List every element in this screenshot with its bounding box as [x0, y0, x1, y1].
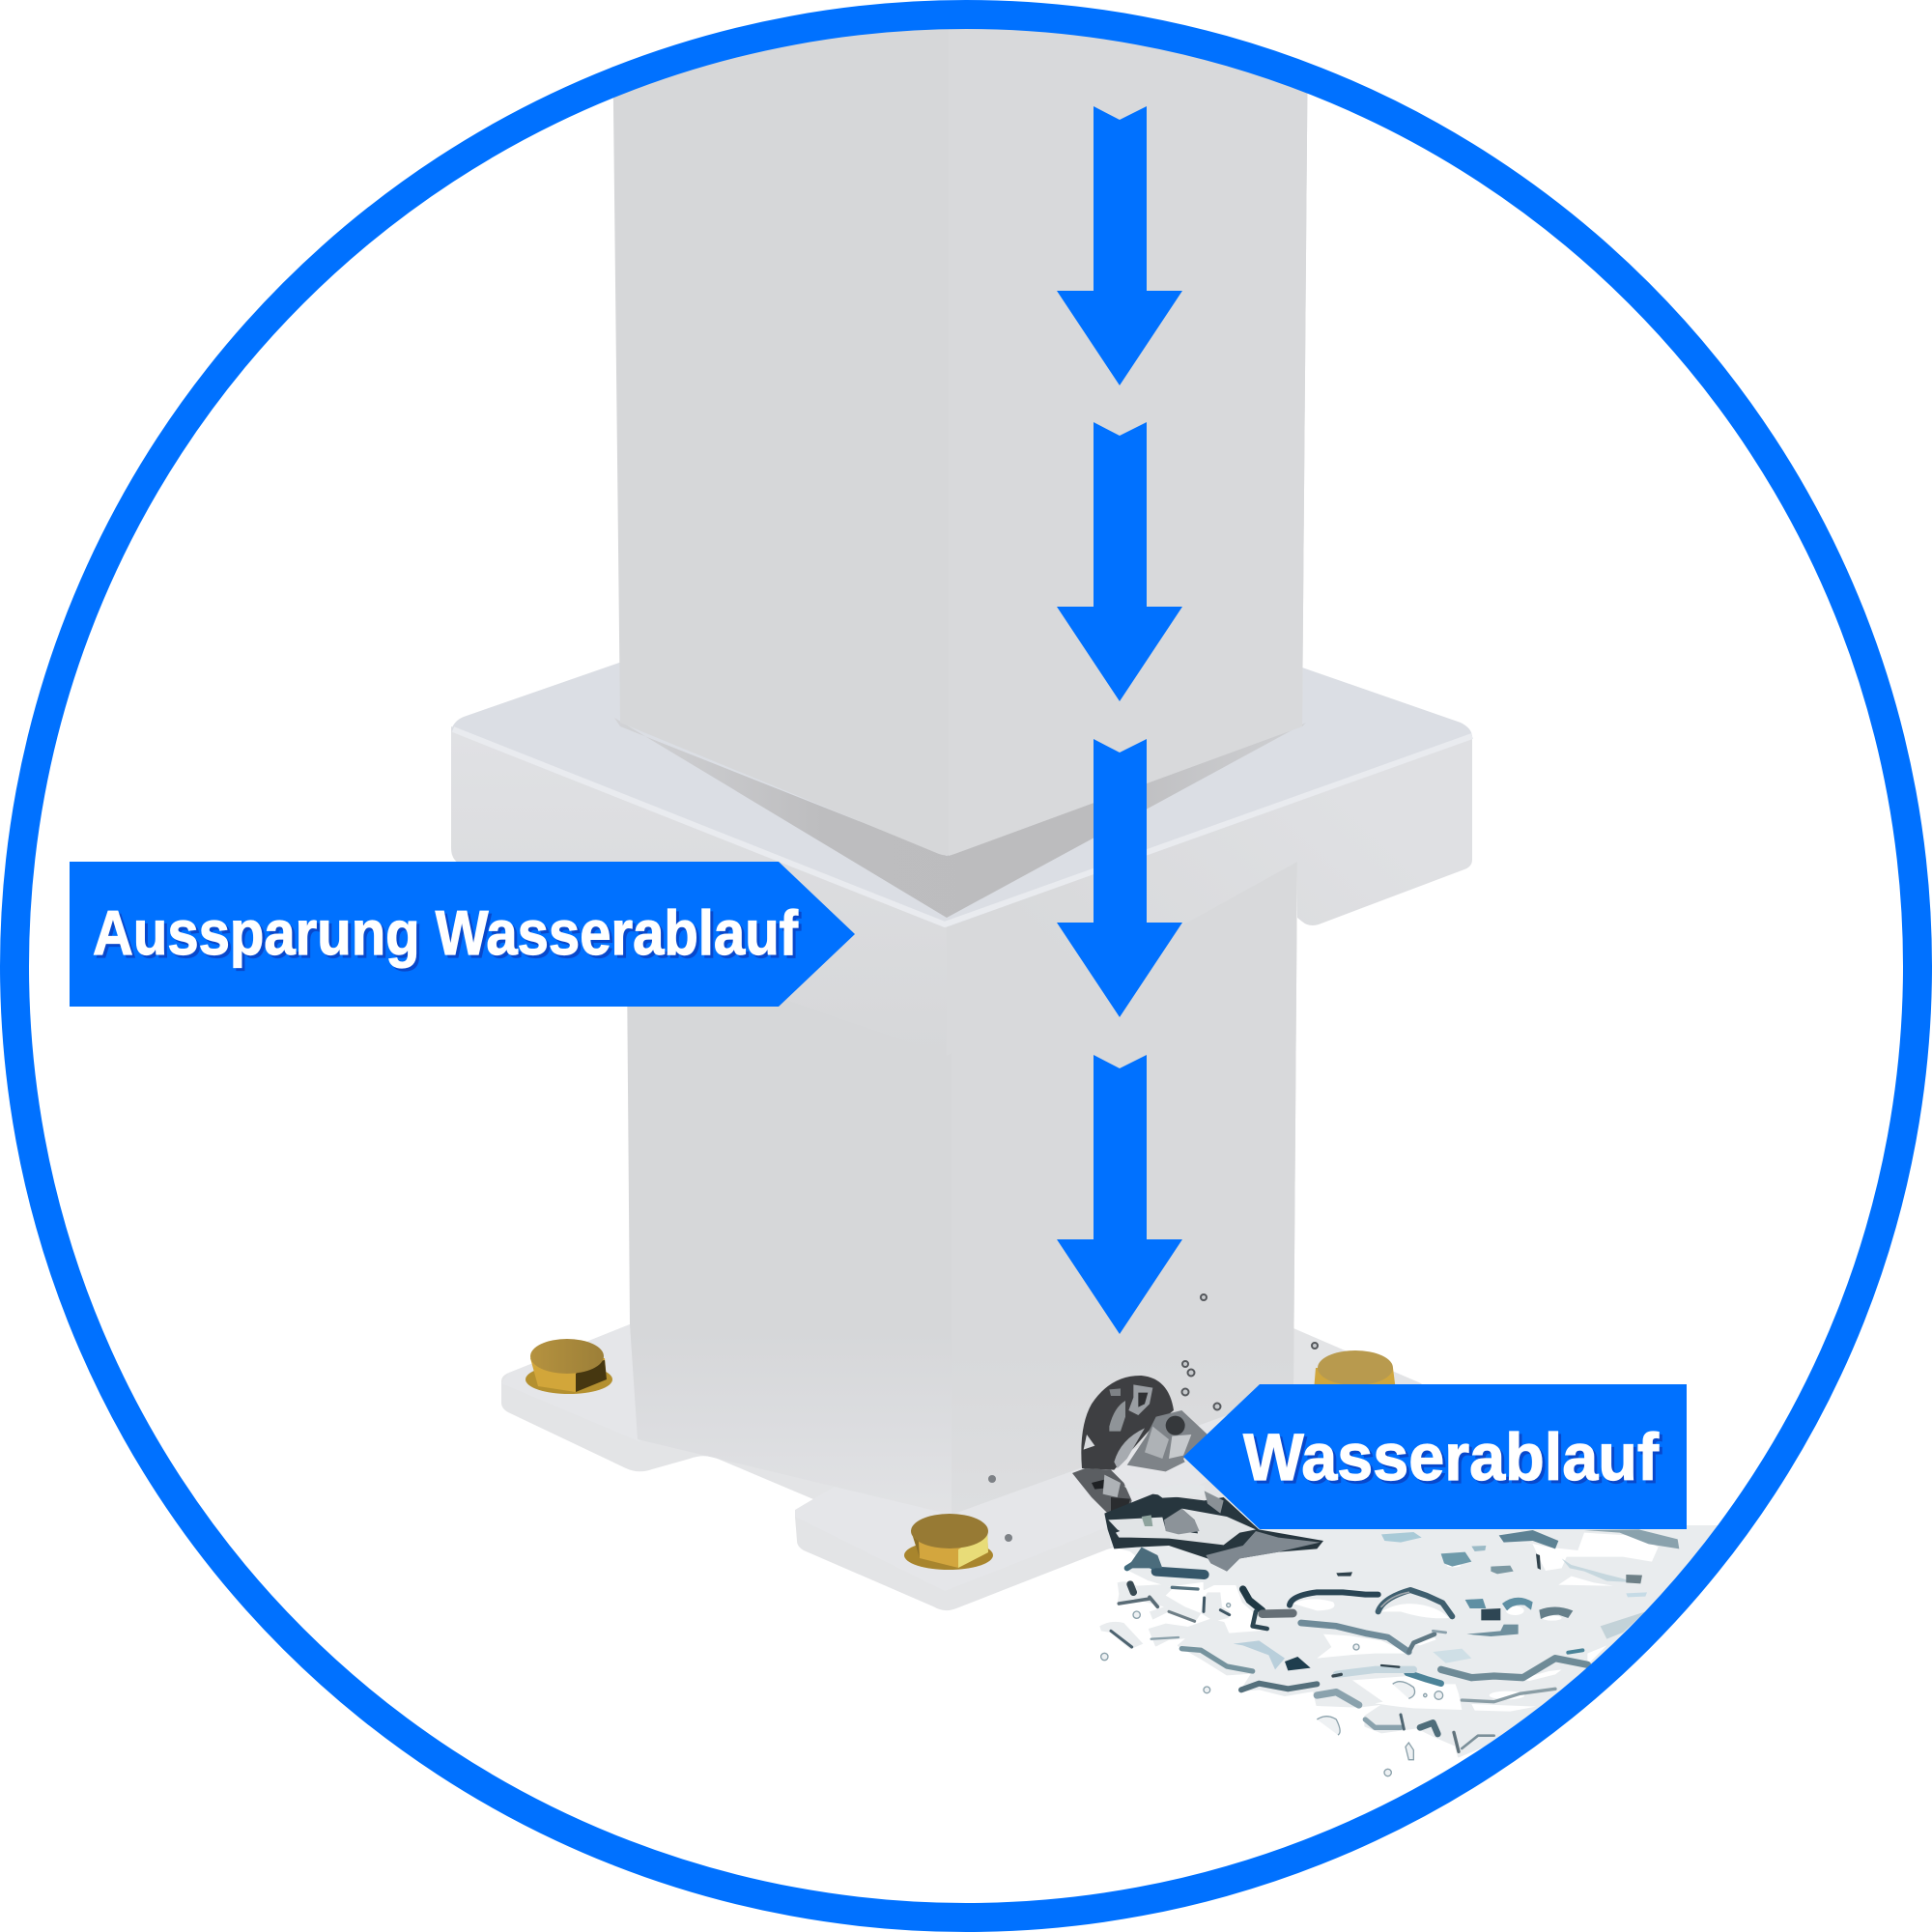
base plate	[501, 1324, 1430, 1610]
label: Wasserablauf: Wasserablauf	[1246, 1423, 1662, 1497]
collar right face	[1162, 739, 1472, 925]
dark stream	[1104, 1494, 1323, 1572]
water gaps	[1293, 1533, 1659, 1712]
label: Aussparung Wasserablauf: Aussparung Wasserablauf	[96, 900, 801, 971]
droplets on post	[1182, 1294, 1318, 1410]
lower post	[627, 869, 1297, 1459]
bolt rear right	[1314, 1350, 1395, 1384]
label: Wasserablauf: Wasserablauf	[1243, 1420, 1660, 1494]
label: Wasserablauf	[1183, 1384, 1687, 1529]
illustration: post with collar and base plate	[451, 19, 1719, 1776]
collar	[451, 663, 1473, 927]
water jet at drain	[1072, 1376, 1323, 1572]
bolt rear left	[526, 1339, 612, 1394]
water splash	[1099, 1526, 1719, 1756]
dark rims	[1111, 1560, 1587, 1751]
collar top rim	[451, 663, 1472, 926]
main water sheet	[1111, 1526, 1719, 1756]
label: Aussparung Wasserablauf	[70, 862, 855, 1007]
screw dots	[988, 1475, 1012, 1542]
upper post	[612, 19, 1308, 856]
arrow 4	[1057, 1055, 1182, 1334]
water shading	[1336, 1529, 1679, 1639]
collar left face	[451, 726, 750, 862]
arrow 3	[1057, 739, 1182, 1017]
drain opening	[1081, 1376, 1174, 1470]
lower water highlights	[1234, 1640, 1471, 1670]
bolt front	[904, 1514, 993, 1570]
loose water lobes	[1099, 1581, 1230, 1649]
collar recess	[614, 718, 1306, 918]
arrow 2	[1057, 422, 1182, 701]
label: Aussparung Wasserablauf: Aussparung Wasserablauf	[93, 897, 798, 968]
loose droplets	[1100, 1603, 1443, 1777]
arrow 1	[1057, 106, 1182, 385]
